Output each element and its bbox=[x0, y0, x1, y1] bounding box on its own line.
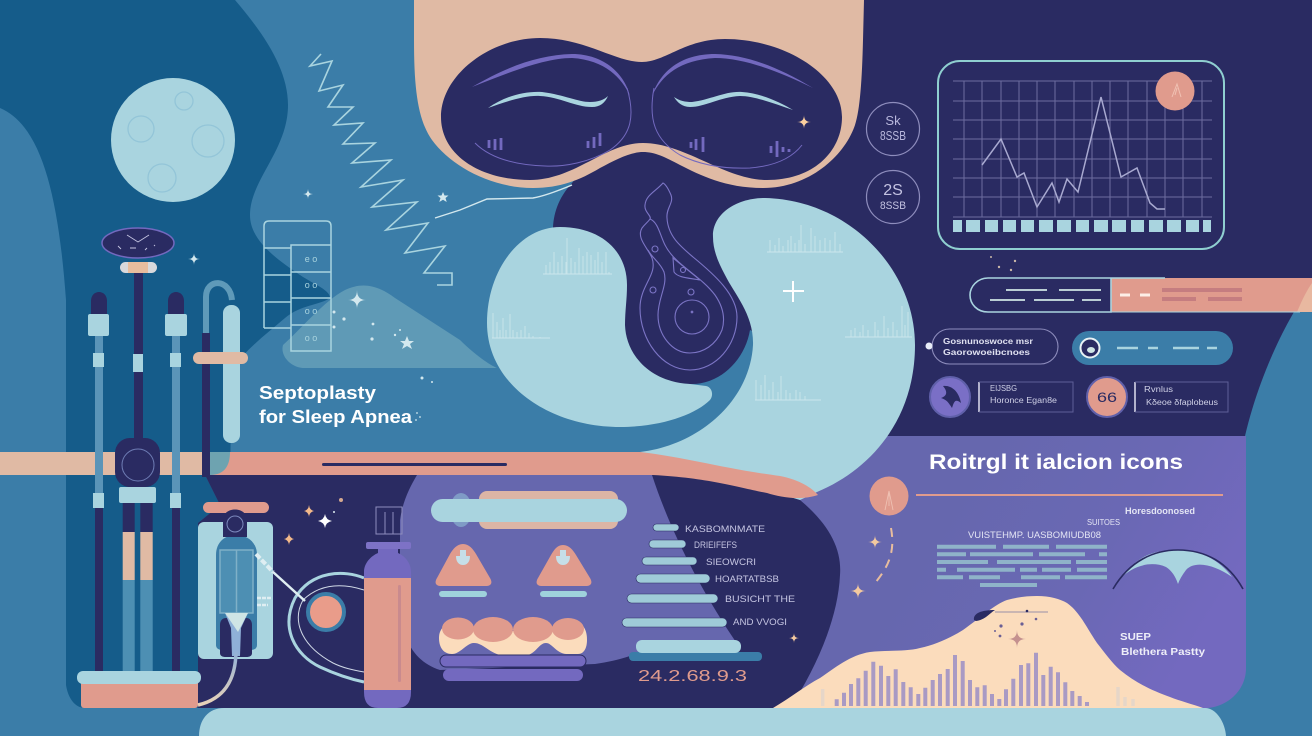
panel text placeholder lines bbox=[937, 547, 1107, 585]
small star bbox=[789, 633, 799, 643]
bottom light bar bbox=[199, 708, 1226, 736]
table icon bbox=[264, 221, 331, 351]
right brow and lens bbox=[652, 54, 813, 96]
staircase labels: AND VVOGI bbox=[733, 617, 787, 628]
number readout: 24.2.68.9.3 bbox=[638, 668, 747, 685]
white pulse line bbox=[435, 185, 572, 218]
icon card two: 66 bbox=[1097, 389, 1117, 405]
text pill: Gosnunoswoce msr bbox=[943, 337, 1033, 346]
oval tube ring bbox=[289, 573, 364, 682]
left light blue blob bbox=[487, 227, 712, 427]
pole left bbox=[88, 292, 109, 671]
mountain shape bbox=[282, 285, 497, 368]
dome icon bbox=[1113, 550, 1243, 589]
circular badge two: 2S bbox=[883, 182, 903, 199]
nose and airway contour drawing bbox=[640, 183, 737, 370]
navy lower section bbox=[198, 475, 840, 708]
chart salmon badge bbox=[1156, 72, 1194, 110]
heading rule bbox=[916, 494, 1223, 496]
chart grid bbox=[953, 81, 1212, 217]
circular badge one: 8SSB bbox=[880, 128, 906, 143]
moon bbox=[111, 78, 235, 202]
panel side label: SUEP bbox=[1120, 632, 1151, 643]
salmon wave band bbox=[210, 452, 818, 498]
left brow and lens bbox=[472, 54, 630, 96]
translucent tube overlap bbox=[210, 452, 230, 475]
circular badge two: 8SSB bbox=[880, 200, 906, 212]
navy background region with nose bbox=[553, 0, 1312, 500]
pole right bbox=[165, 292, 187, 671]
warning triangle left bbox=[436, 544, 491, 597]
mask sparkle bbox=[797, 115, 811, 129]
dark blue backdrop panel bbox=[0, 0, 330, 708]
purple panel bbox=[780, 436, 1246, 708]
icon card one: Horonce Egan8e bbox=[990, 396, 1058, 405]
panel small labels: Horesdoonosed bbox=[1125, 506, 1195, 517]
staircase labels: HOARTATBSB bbox=[715, 574, 779, 585]
zigzag sleep signal bbox=[310, 54, 452, 285]
hill detail marks bbox=[974, 610, 1048, 648]
center title: for Sleep Apnea bbox=[259, 407, 413, 427]
hill faint bars bbox=[823, 687, 1133, 706]
stand base bbox=[77, 671, 201, 708]
icon card one bbox=[930, 377, 1073, 417]
hill bar chart bbox=[837, 653, 1087, 706]
table icon: e o bbox=[305, 254, 317, 264]
text pill: Gaorowoeibcnoes bbox=[943, 348, 1031, 357]
catheter line bbox=[256, 554, 305, 605]
panel small labels bbox=[968, 506, 1195, 540]
circular badge one bbox=[866, 102, 920, 156]
right blue corner bbox=[1245, 285, 1312, 736]
blue pill bbox=[1072, 331, 1233, 365]
face shape bbox=[414, 0, 864, 188]
band dark line bbox=[322, 463, 507, 466]
panel side label: Blethera Pastty bbox=[1121, 647, 1206, 658]
circular badge two bbox=[866, 170, 920, 224]
sleep mask bbox=[441, 38, 842, 180]
icon card two bbox=[1087, 377, 1228, 417]
icon card two: Kδeoe δfaplobeus bbox=[1146, 398, 1218, 407]
sparkle dots bbox=[990, 256, 1016, 271]
pill stack in blob bbox=[431, 491, 627, 529]
warning triangle right bbox=[537, 545, 591, 597]
layered wave cushion bbox=[439, 617, 587, 681]
chart line bbox=[982, 97, 1165, 209]
staircase labels: BUSICHT THE bbox=[725, 594, 795, 605]
table icon: o o bbox=[305, 333, 317, 343]
cream hill bbox=[773, 596, 1203, 708]
table icon: o o bbox=[305, 306, 317, 316]
panel small labels: VUISTEHMP. UASBOMIUDB08 bbox=[968, 530, 1101, 540]
outlined pill with lines bbox=[970, 278, 1300, 312]
plus icon bbox=[783, 281, 804, 302]
icon card two: Rvnlus bbox=[1144, 385, 1173, 394]
chart bottom cells bbox=[953, 220, 1211, 232]
mask small bars bbox=[489, 133, 789, 157]
center title bbox=[259, 383, 413, 427]
left instrument poles bbox=[77, 228, 201, 708]
medicine bottle bbox=[364, 507, 411, 708]
drainage device bbox=[198, 502, 273, 705]
salmon banner bbox=[1111, 278, 1312, 312]
right light blue blob bbox=[640, 198, 915, 500]
sparkles near table bbox=[188, 189, 448, 421]
salmon target circle bbox=[308, 594, 344, 630]
closed eyes bbox=[488, 92, 608, 108]
centre pole bbox=[102, 228, 174, 671]
staircase bars bbox=[622, 524, 727, 627]
chart panel bbox=[938, 61, 1224, 249]
purple panel heading: Roitrgl it ialcion icons bbox=[929, 451, 1183, 474]
center title: Septoplasty bbox=[259, 383, 376, 403]
salmon badge in panel bbox=[870, 476, 908, 516]
summary bar bbox=[629, 640, 762, 661]
circular badge one: Sk bbox=[885, 113, 901, 128]
staircase labels: SIEOWCRI bbox=[706, 557, 756, 568]
staircase labels: KASBOMNMATE bbox=[685, 524, 765, 535]
text pill bbox=[926, 329, 1058, 364]
peach band bbox=[0, 452, 210, 475]
tube with capsule bbox=[193, 283, 248, 477]
purple central blob bbox=[400, 475, 740, 670]
sparkles in navy bbox=[284, 498, 343, 545]
staircase labels: DRIEIFEFS bbox=[694, 540, 737, 551]
mini histograms on blobs bbox=[492, 225, 912, 400]
dashed arc and stars bbox=[850, 528, 892, 599]
table icon: o o bbox=[305, 280, 317, 290]
staircase labels bbox=[685, 524, 795, 628]
icon card one: EIJSBG bbox=[990, 384, 1017, 393]
panel small labels: SUITOES bbox=[1087, 518, 1120, 527]
panel side label bbox=[1120, 632, 1206, 658]
